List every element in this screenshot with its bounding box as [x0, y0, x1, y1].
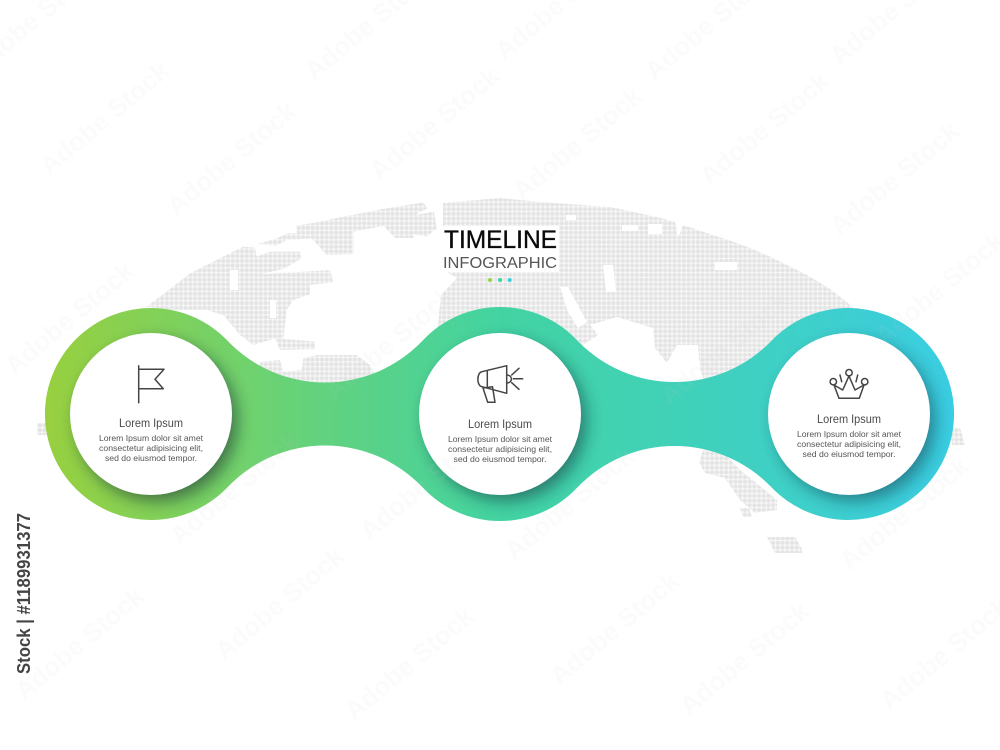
title block [443, 226, 559, 282]
watermark layer: Adobe Stock [364, 60, 505, 186]
step 3 panel [768, 333, 930, 495]
watermark layer: Adobe Stock [339, 600, 480, 726]
watermark layer: Adobe Stock [354, 420, 495, 546]
icon: megaphone [478, 366, 523, 402]
step 3 text: Lorem Ipsum dolor sit amet [797, 429, 902, 439]
step 2 white circle [419, 333, 581, 495]
step 3 text: consectetur adipisicing elit, [797, 439, 901, 449]
step 1 text: Lorem Ipsum dolor sit amet [99, 433, 204, 443]
title dots [488, 278, 512, 282]
watermark layer: Adobe Stock [209, 540, 350, 666]
watermark layer: Adobe Stock [319, 280, 460, 406]
watermark layer: Adobe Stock [34, 55, 175, 181]
watermark layer: Adobe Stock [674, 595, 815, 721]
watermark layer: Adobe Stock [544, 565, 685, 691]
step 3 heading: Lorem Ipsum [817, 414, 881, 426]
watermark layer: Adobe Stock [0, 255, 140, 381]
stock id label: Stock | #1189931377 [14, 513, 34, 674]
subtitle: INFOGRAPHIC: INFOGRAPHIC [443, 255, 557, 272]
watermark layer: Adobe Stock [9, 580, 150, 706]
step 2 panel [419, 333, 581, 495]
step 3 text [797, 429, 902, 459]
step 1 text [99, 433, 204, 463]
watermark layer: Adobe Stock [834, 450, 975, 576]
step 3 white circle [768, 333, 930, 495]
watermark layer: Adobe Stock [499, 440, 640, 566]
step 3 text: sed do eiusmod tempor. [802, 449, 896, 459]
step 1 text: sed do eiusmod tempor. [105, 453, 197, 463]
watermark layer: Adobe Stock [507, 80, 648, 206]
step 2 text: consectetur adipisicing elit, [448, 444, 552, 454]
step 1 panel [70, 333, 232, 495]
title: TIMELINE: TIMELINE [444, 226, 557, 254]
watermark layer: Adobe Stock [694, 65, 835, 191]
step 1 heading: Lorem Ipsum [119, 418, 183, 430]
icon: crown [830, 370, 868, 398]
gradient timeline band [45, 307, 954, 521]
watermark layer: Adobe Stock [161, 95, 302, 221]
step 1 white circle [70, 333, 232, 495]
step 2 text: sed do eiusmod tempor. [454, 454, 546, 464]
step 2 heading: Lorem Ipsum [468, 419, 532, 431]
watermark layer: Adobe Stock [654, 285, 795, 411]
step 2 text [448, 434, 553, 464]
step 2 text: Lorem Ipsum dolor sit amet [448, 434, 553, 444]
icon: flag [139, 366, 164, 403]
step 1 text: consectetur adipisicing elit, [99, 443, 203, 453]
dotted world map [30, 190, 970, 560]
circle shadows on band [77, 341, 935, 501]
watermark layer: Adobe Stock [164, 425, 305, 551]
watermark layer: Adobe Stock [824, 115, 965, 241]
